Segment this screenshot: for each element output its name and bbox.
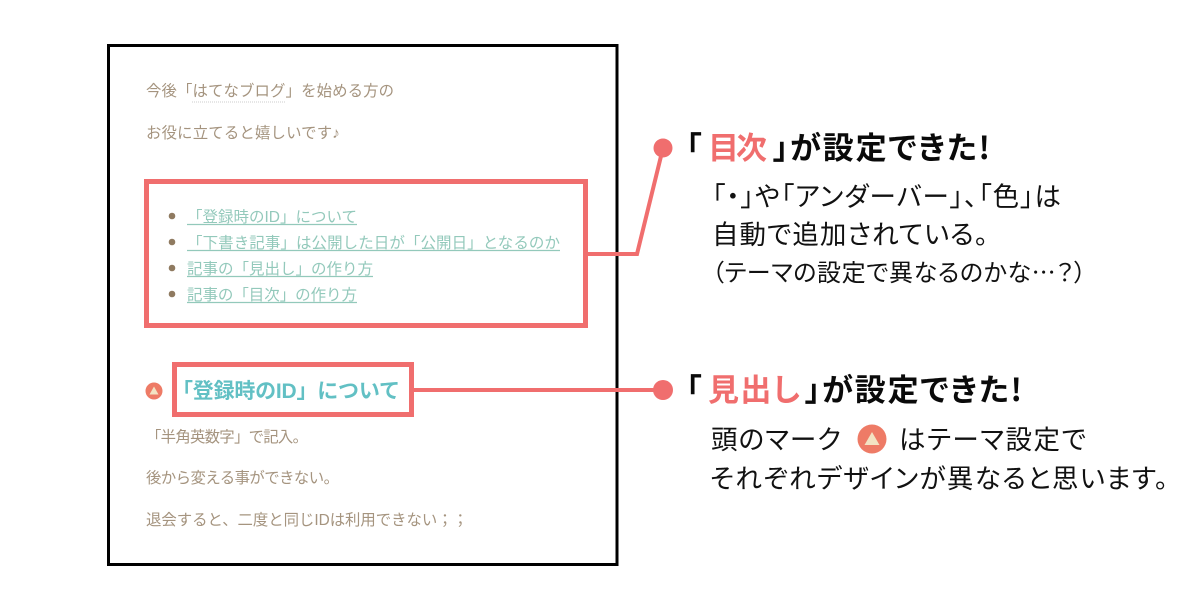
panel: heading highlight [172, 364, 412, 414]
table of contents links: 記事の「見出し」の作り方 [187, 260, 373, 278]
text block: heading note: はテーマ設定で [899, 418, 1086, 457]
table of contents links [187, 208, 560, 304]
panel: blog screenshot frame [108, 46, 617, 564]
table of contents links: 「下書き記事」は公開した日が「公開日」となるのか [187, 234, 560, 252]
callout: table of contents [686, 123, 1086, 288]
text block: heading note [710, 418, 1168, 496]
callout: heading [686, 365, 1168, 496]
heading: heading set: 「 [686, 365, 702, 410]
bullets [169, 213, 175, 297]
text block: blog intro [146, 81, 394, 142]
icon: heading mark [146, 382, 162, 400]
text block: blog body: 退会すると、二度と同じIDは利用できない；； [146, 511, 468, 529]
table of contents links: 記事の「目次」の作り方 [187, 286, 357, 304]
text block: heading note: それぞれデザインが異なると思います。 [710, 457, 1168, 496]
panel: table of contents highlight [146, 182, 586, 326]
heading: table of contents set: が設定できた! [790, 123, 990, 168]
text block: blog intro: お役に立てると嬉しいです♪ [146, 124, 340, 142]
heading: heading set: 」 [805, 365, 820, 410]
text block: blog body [146, 428, 468, 529]
icon: heading mark example [858, 424, 886, 454]
heading: table of contents set: 」 [773, 123, 788, 168]
heading: heading set: が設定できた! [822, 365, 1022, 410]
text block: blog intro: 今後「はてなブログ」を始める方の [146, 81, 394, 100]
panel: heading highlight: 「登録時のID」について [172, 380, 400, 403]
text block: heading note: 頭のマーク [711, 418, 841, 457]
text block: table of contents note: （テーマの設定で異なるのかな…？） [712, 253, 1086, 288]
heading: table of contents set: 「 [686, 123, 702, 168]
heading: table of contents set: 目次 [708, 123, 767, 168]
table of contents links: 「登録時のID」について [187, 208, 357, 226]
heading: heading set: 見出し [708, 365, 800, 410]
text block: table of contents note: 「・」や「アンダーバー」、「色」は [712, 175, 1061, 214]
text block: table of contents note [712, 175, 1086, 288]
arrow: connector to table of contents callout [586, 138, 672, 254]
text block: table of contents note: 自動で追加されている。 [712, 213, 988, 252]
arrow: connector to heading callout [412, 380, 673, 400]
heading: table of contents set [686, 123, 990, 168]
heading: heading set [686, 365, 1022, 410]
text block: blog body: 後から変える事ができない。 [146, 469, 339, 487]
text block: blog body: 「半角英数字」で記入。 [146, 428, 308, 446]
